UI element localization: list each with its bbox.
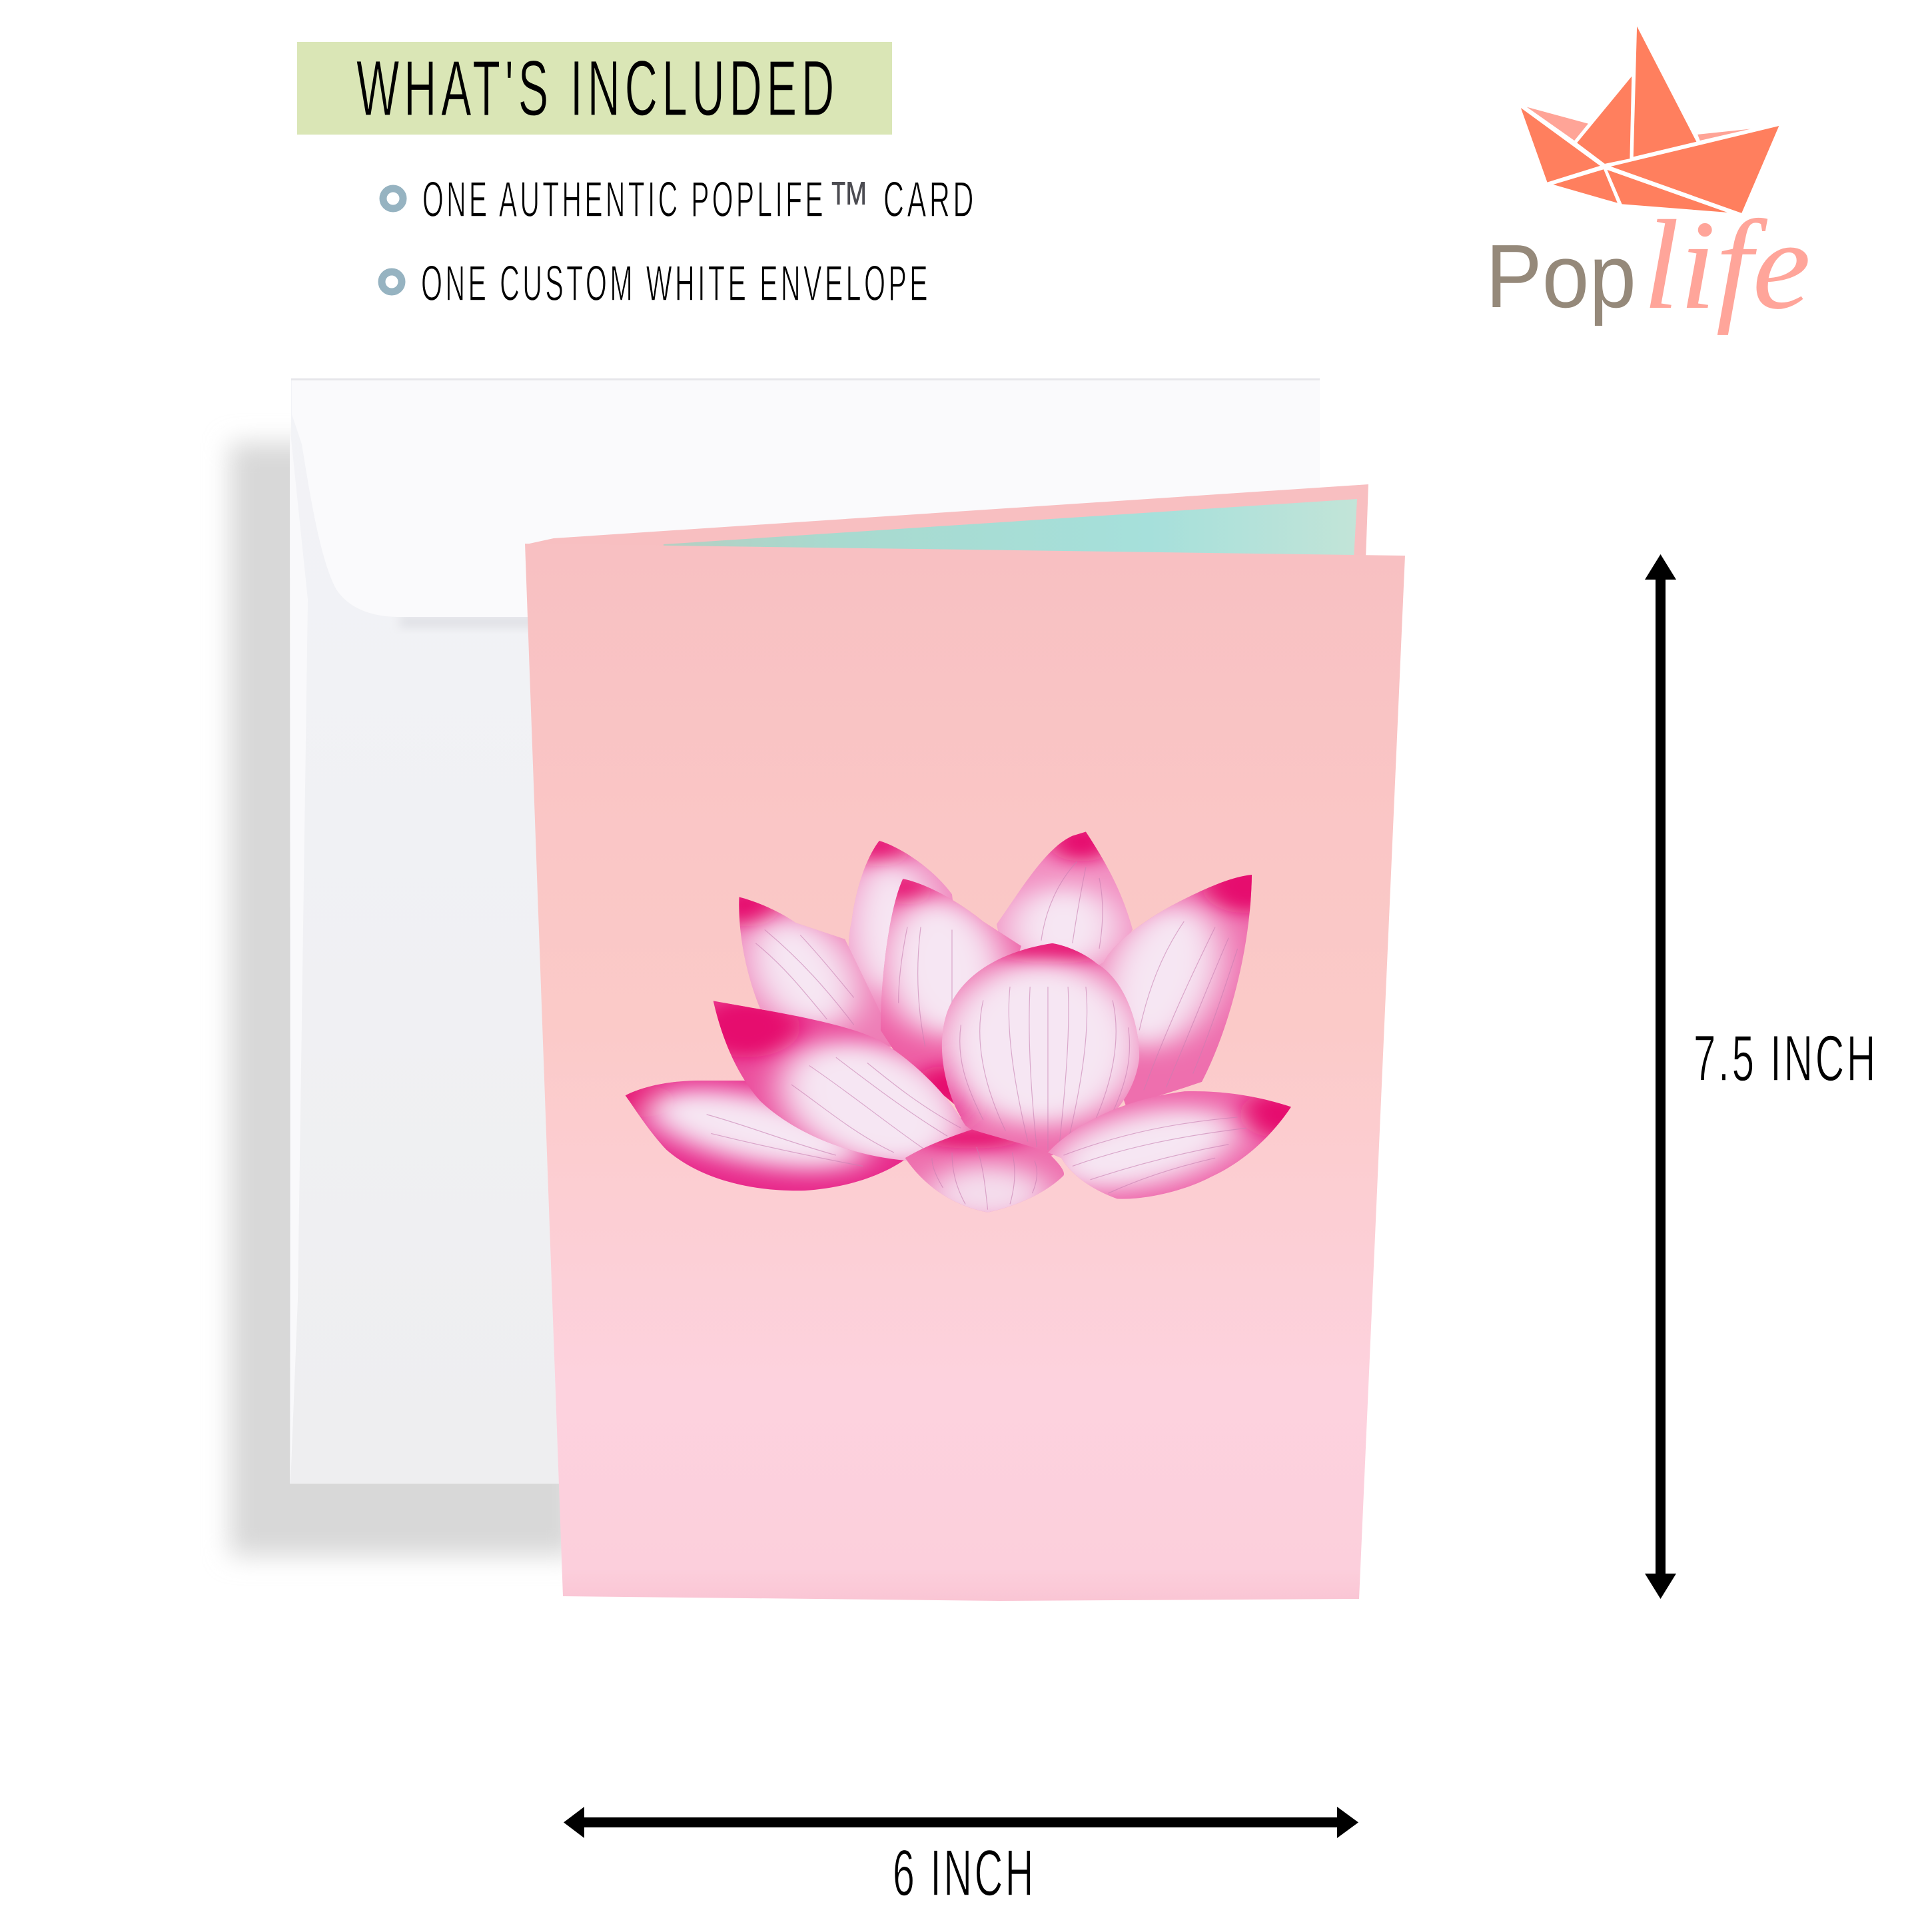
list item: one authentic Poplife card: ™ — [828, 170, 869, 237]
greeting card — [525, 484, 1405, 1601]
list item: one custom white envelope: ONE CUSTOM WHITE ENVELOPE — [421, 255, 931, 311]
flap shadow — [400, 616, 666, 628]
petal: bottom centre — [905, 1130, 1064, 1212]
petal: bottom left — [625, 1081, 904, 1191]
icon: origami boat — [1521, 27, 1779, 213]
card inner teal page — [664, 499, 1357, 560]
envelope flap — [292, 380, 1320, 617]
logo wordmark: life — [1643, 194, 1811, 336]
list item: one authentic Poplife card: ONE AUTHENTIC POPLIFE — [422, 171, 826, 227]
petal: back right — [997, 831, 1133, 965]
heading banner: What's Included — [297, 42, 892, 135]
card back panel — [526, 484, 1368, 560]
arrow: width dimension — [564, 1807, 1358, 1838]
illustration: lotus flower — [604, 813, 1316, 1239]
heading banner: What's Included: WHAT'S INCLUDED — [356, 45, 839, 133]
envelope body — [290, 378, 1320, 1484]
petal: back left — [849, 841, 953, 1047]
petal: large left — [713, 1001, 971, 1161]
list item: one authentic Poplife card: CARD — [883, 171, 977, 227]
petal: far right — [1099, 875, 1252, 1105]
list item: one custom white envelope — [382, 255, 931, 311]
logo wordmark — [1486, 194, 1811, 336]
list item: one authentic Poplife card — [383, 170, 977, 237]
logo: Poplife origami boat — [1486, 27, 1811, 336]
logo wordmark: Pop — [1486, 226, 1636, 326]
petal: centre bud — [942, 943, 1139, 1156]
petal: bottom right — [1048, 1091, 1291, 1199]
card front panel — [525, 544, 1405, 1601]
arrow: height dimension — [1645, 554, 1676, 1599]
label: 6 inch: 6 INCH — [893, 1836, 1036, 1909]
petal: middle left — [881, 879, 1021, 1105]
envelope shadow — [230, 443, 576, 1556]
envelope with drop shadow — [230, 378, 1320, 1556]
petal: far left — [739, 897, 891, 1047]
